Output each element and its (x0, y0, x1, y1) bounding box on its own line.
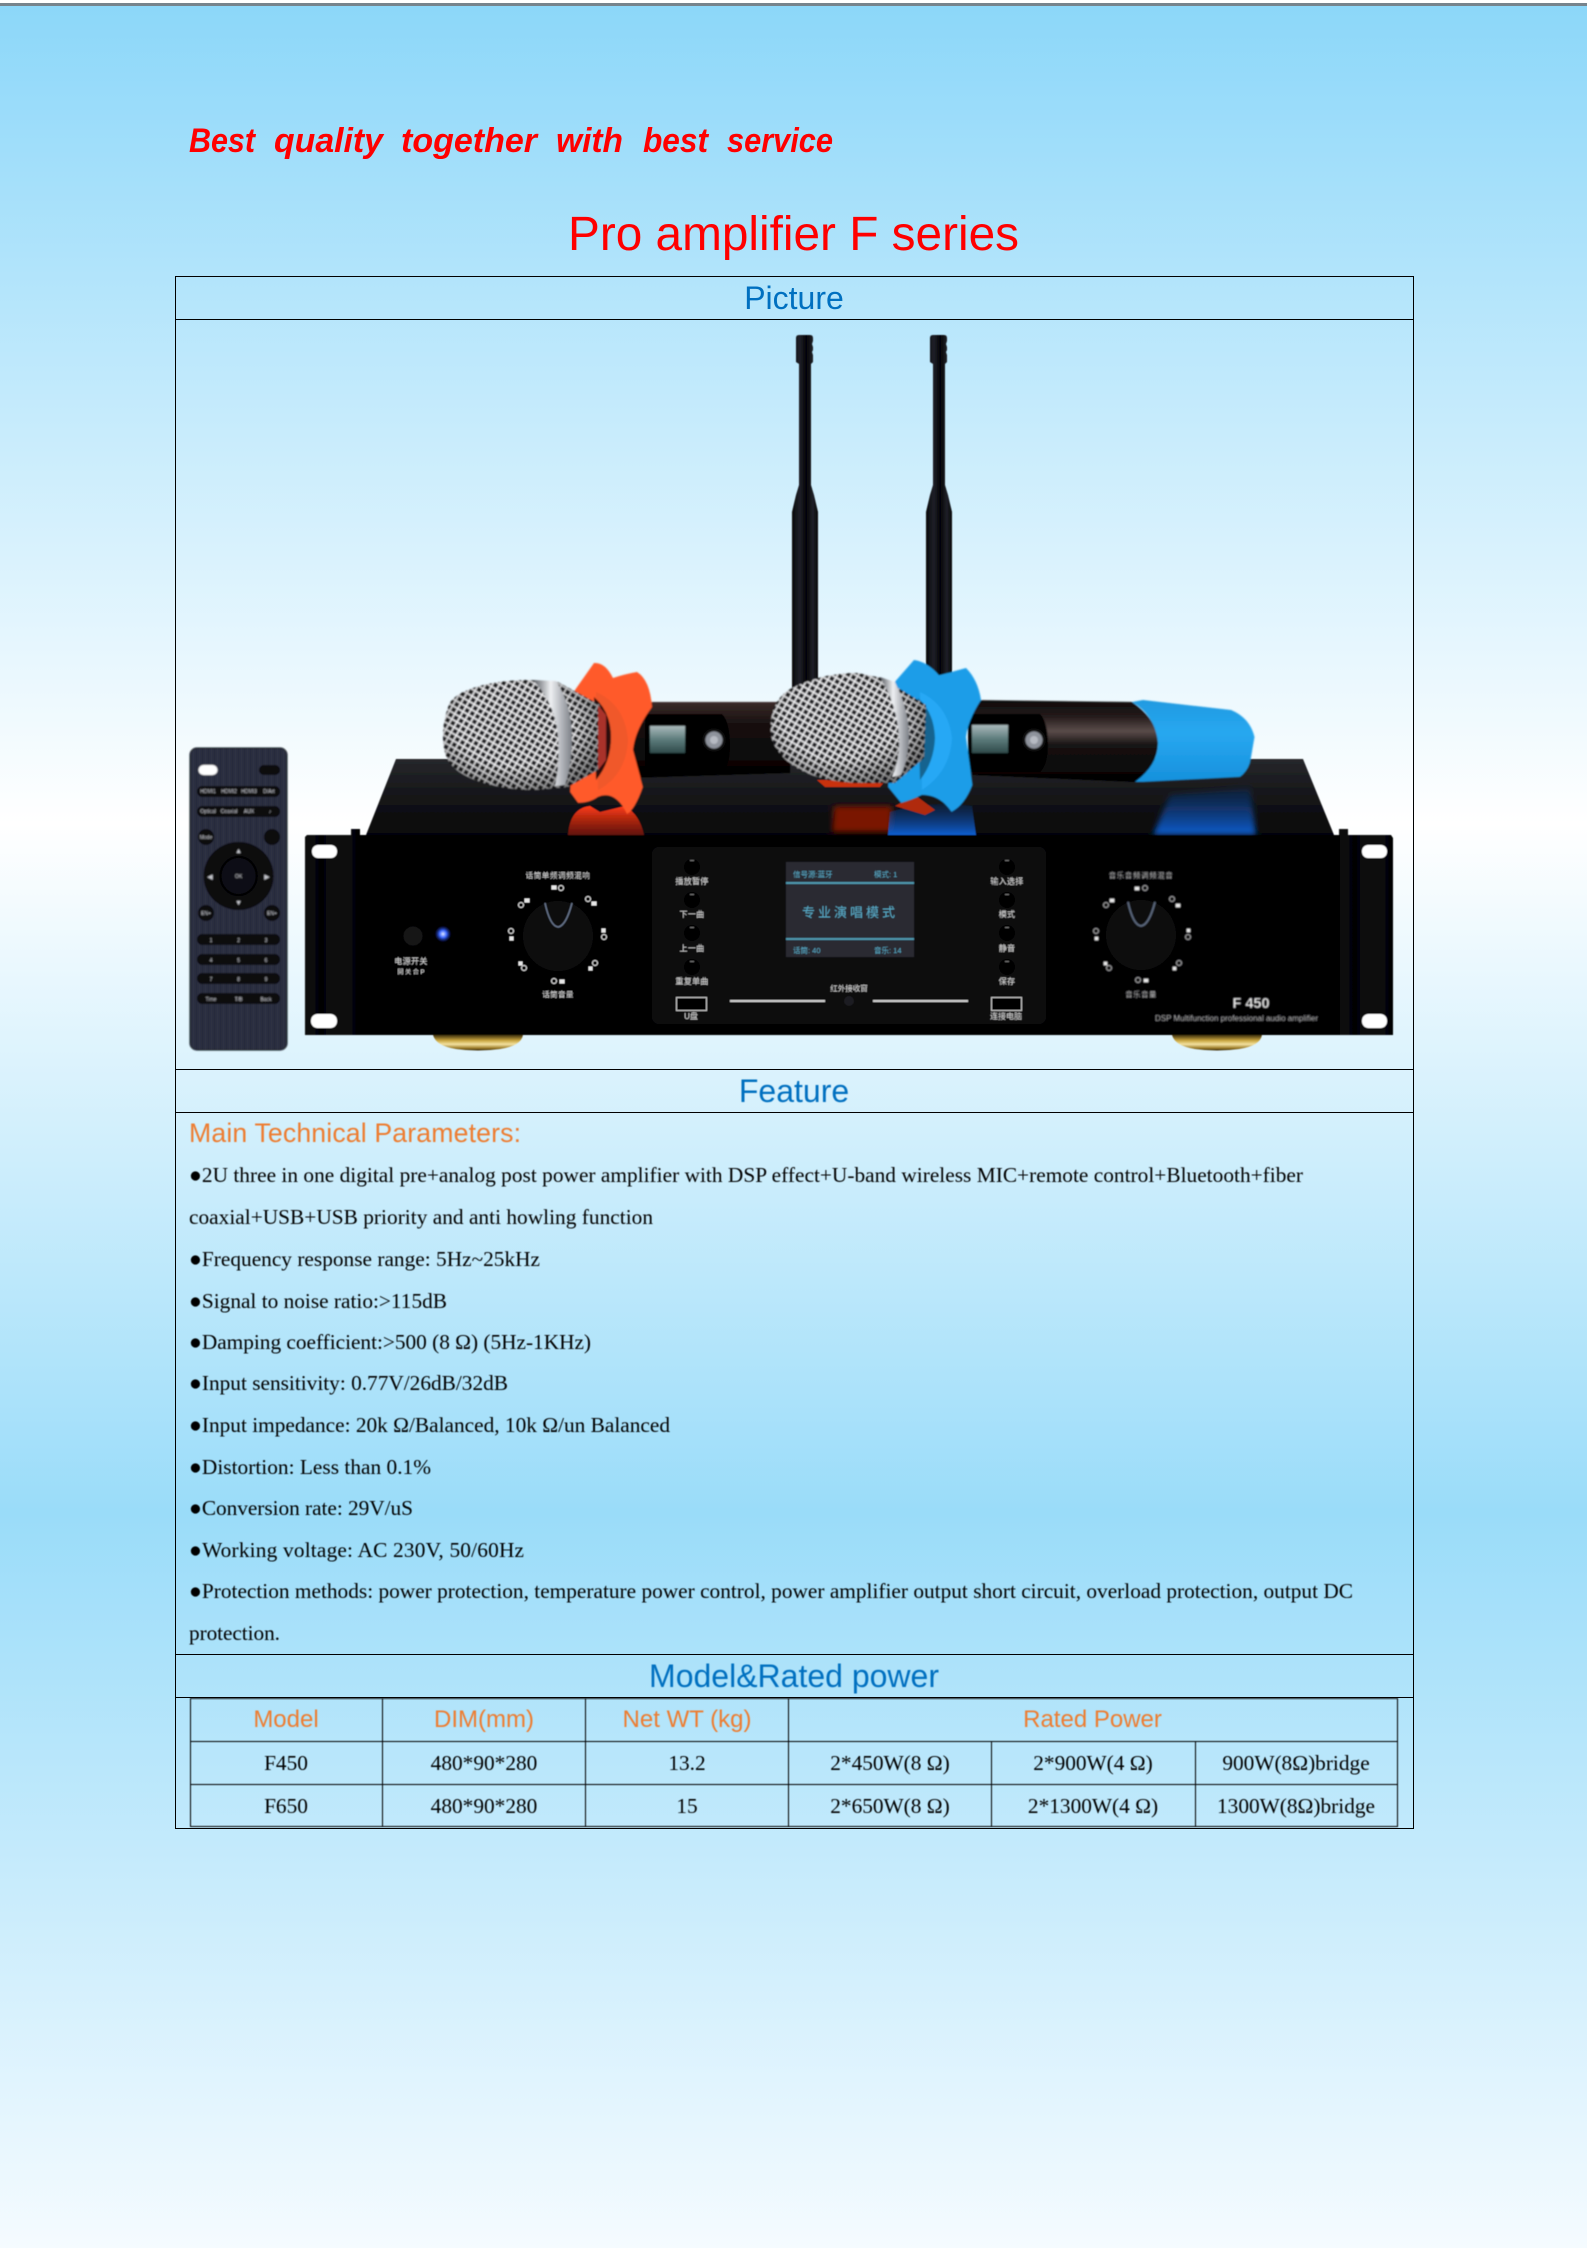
row F650: 15 (676, 1794, 698, 1818)
remote number keys: Back (260, 997, 272, 1003)
row F450: 2*450W(8 Ω) (830, 1751, 950, 1775)
microphone one (443, 663, 790, 814)
row F650: F650 (264, 1794, 308, 1818)
remote top buttons (197, 765, 280, 845)
mic two handle (965, 700, 1158, 782)
row F650 (264, 1794, 1375, 1818)
model badge: F 450 (1232, 996, 1270, 1012)
remote number keys: 6 (265, 958, 268, 964)
technical parameters list: ●Damping coefficient:>500 (8 Ω) (5Hz-1KHz) (189, 1330, 591, 1354)
tagline: Best (189, 122, 256, 160)
amplifier feet (433, 1035, 1262, 1050)
table header: Rated Power (1023, 1706, 1162, 1733)
technical parameters list: ●Protection methods: power protection, temperature power control, power amplifier output short circuit, overload protection, output DC (189, 1579, 1353, 1603)
USB ports and IR window: U盘 (684, 1011, 698, 1021)
technical parameters list: coaxial+USB+USB priority and anti howling function (189, 1205, 653, 1229)
right knob with labels (1094, 870, 1190, 999)
amplifier front panel (358, 835, 1340, 1035)
remote top buttons: HDMI3 (241, 789, 257, 795)
left buttons: 下一曲 (680, 909, 704, 919)
tagline: with (556, 122, 623, 160)
LCD display: 音乐: 14 (874, 945, 902, 955)
remote top buttons: ♪ (269, 809, 272, 815)
remote number keys: 9 (265, 977, 268, 983)
technical parameters list: ●Signal to noise ratio:>115dB (189, 1289, 447, 1313)
row F450: F450 (264, 1751, 308, 1775)
model badge (1155, 996, 1318, 1023)
remote number keys: 5 (237, 958, 240, 964)
row F650: 480*90*280 (431, 1794, 537, 1818)
remote d-pad: ▶ (264, 874, 270, 881)
technical parameters list: ●Distortion: Less than 0.1% (189, 1455, 431, 1479)
right buttons: 输入选择 (990, 876, 1024, 886)
row F450: 2*900W(4 Ω) (1033, 1751, 1153, 1775)
table grid (190, 1698, 1398, 1827)
remote number keys: 1 (210, 938, 213, 944)
remote top buttons: HDMI1 (200, 789, 216, 795)
technical parameters list: protection. (189, 1621, 280, 1645)
remote top buttons: AUX (244, 809, 255, 815)
USB ports and IR window (676, 983, 1022, 1021)
mic two grille (770, 673, 926, 783)
table header: Model (253, 1706, 319, 1733)
remote d-pad: ▲ (235, 848, 242, 855)
remote d-pad: ◀ (207, 874, 213, 881)
mic two display and button (968, 714, 1048, 772)
technical parameters list (189, 1163, 1353, 1645)
centre control panel (652, 847, 1046, 1024)
left buttons: 上一曲 (680, 943, 704, 953)
mic one grille (443, 680, 606, 790)
remote d-pad: OK (235, 874, 243, 880)
left knob with labels: 话筒单频调频混响 (526, 870, 590, 880)
model table (190, 1698, 1398, 1827)
microphone two (770, 660, 1254, 812)
remote d-pad: EN+ (201, 911, 211, 917)
row F450: 480*90*280 (431, 1751, 537, 1775)
remote control (190, 748, 287, 1050)
right buttons: 静音 (999, 943, 1015, 953)
remote top buttons: Mode (200, 835, 212, 841)
remote number keys: 3 (265, 938, 268, 944)
remote d-pad: ▼ (235, 900, 242, 907)
technical parameters list: ●Frequency response range: 5Hz~25kHz (189, 1247, 540, 1271)
remote number keys (197, 934, 280, 1004)
USB ports and IR window: 连接电脑 (990, 1011, 1022, 1021)
left buttons: 重复单曲 (675, 976, 709, 986)
left knob with labels: 话筒音量 (542, 989, 574, 999)
outer table frame (175, 276, 1414, 1829)
USB ports and IR window: 红外接收窗 (830, 983, 868, 993)
tagline: service (727, 122, 833, 160)
mic one orange grip (570, 663, 652, 814)
power switch and LED: 開 关 合 P (397, 968, 425, 976)
row F450: 13.2 (668, 1751, 706, 1775)
right buttons (990, 859, 1024, 986)
technical parameters list: ●Working voltage: AC 230V, 50/60Hz (189, 1538, 524, 1562)
remote number keys: 4 (210, 958, 213, 964)
left buttons: 播放暂停 (675, 876, 709, 886)
right knob with labels: 音乐音量 (1125, 989, 1157, 999)
mic two blue cap (1132, 700, 1254, 782)
mic two collar (918, 692, 952, 790)
remote number keys: 2 (237, 938, 240, 944)
tagline (189, 122, 833, 160)
left buttons (675, 859, 709, 986)
heading: Picture: Picture (744, 280, 844, 316)
LCD display: 信号源:蓝牙 (793, 869, 833, 879)
remote top buttons: Optical (200, 809, 216, 815)
LCD display: 专业演唱模式 (802, 905, 898, 920)
remote number keys: 8 (237, 977, 240, 983)
title: Pro amplifier F series (568, 208, 1019, 261)
amplifier top plate (366, 759, 1334, 835)
remote d-pad: EN+ (267, 911, 277, 917)
tagline: together (401, 122, 539, 160)
tagline: best (643, 122, 710, 160)
remote top buttons: HDMI2 (221, 789, 237, 795)
remote number keys: Time (206, 997, 217, 1003)
table header (253, 1706, 1162, 1733)
right knob with labels: 音乐音频调频混音 (1109, 870, 1173, 880)
technical parameters list: ●Input impedance: 20k Ω/Balanced, 10k Ω/un Balanced (189, 1413, 670, 1437)
row F450: 900W(8Ω)bridge (1222, 1751, 1370, 1775)
reflections on top plate (568, 780, 1256, 835)
model badge: DSP Multifunction professional audio amplifier (1155, 1014, 1318, 1023)
amplifier rack ears (305, 829, 1393, 1035)
right buttons: 保存 (999, 976, 1015, 986)
power switch and LED: 电源开关 (394, 956, 428, 966)
remote d-pad (198, 842, 280, 921)
right buttons: 模式 (999, 909, 1015, 919)
row F650: 2*650W(8 Ω) (830, 1794, 950, 1818)
technical parameters list: ●Conversion rate: 29V/uS (189, 1496, 413, 1520)
remote top buttons: D/Art (263, 789, 275, 795)
mic one display and button (645, 714, 730, 772)
row F650: 2*1300W(4 Ω) (1028, 1794, 1158, 1818)
row F450 (264, 1751, 1370, 1775)
product photo (189, 335, 1398, 1827)
remote number keys: T/B (235, 997, 243, 1003)
row F650: 1300W(8Ω)bridge (1217, 1794, 1375, 1818)
LCD display: 模式: 1 (874, 869, 897, 879)
technical parameters list: ●Input sensitivity: 0.77V/26dB/32dB (189, 1371, 508, 1395)
power switch and LED (394, 925, 451, 976)
technical parameters list: ●2U three in one digital pre+analog post power amplifier with DSP effect+U-band wireless MIC+remote control+Bluetooth+fiber (189, 1163, 1303, 1187)
mic one handle (630, 702, 790, 778)
left knob with labels (508, 870, 606, 999)
antenna right (926, 335, 952, 700)
LCD display: 话筒: 40 (793, 945, 821, 955)
LCD display (786, 862, 914, 957)
remote top buttons: Coaxial (221, 809, 237, 815)
heading: Feature: Feature (739, 1073, 849, 1109)
mic one collar (594, 692, 628, 790)
tagline: quality (274, 122, 385, 160)
table header: DIM(mm) (434, 1706, 534, 1733)
technical parameters subheading: Main Technical Parameters: (189, 1118, 521, 1148)
heading: Model and Rated power: Model&Rated power (649, 1658, 939, 1694)
antenna left (792, 335, 818, 700)
table header: Net WT (kg) (623, 1706, 751, 1733)
mic two blue grip (888, 660, 981, 812)
remote number keys: 7 (210, 977, 213, 983)
